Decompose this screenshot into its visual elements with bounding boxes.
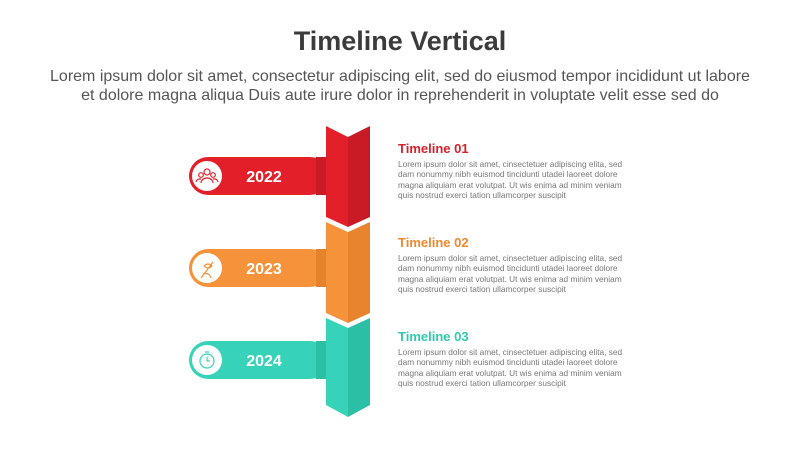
text block: Timeline 03: Timeline 03	[398, 329, 469, 344]
icon: plant	[201, 262, 213, 278]
subtitle: Lorem ipsum dolor sit amet, consectetur adipiscing elit, sed do eiusmod tempor incididunt ut labore	[50, 68, 750, 85]
text block: Timeline 02: Lorem ipsum dolor sit amet, cinsectetuer adipiscing elita, sed dam nonummy nibh euismod tincidunti utadei laoreet dolore magna aliquiam erat volutpat. Ut wis enima ad minim veniam quis nostrud exerci tation ullamcorper suscipit	[398, 253, 622, 294]
subtitle	[50, 68, 750, 104]
step 2023	[189, 222, 370, 323]
icon: people	[196, 169, 218, 183]
text block: Timeline 02	[398, 235, 622, 294]
step 2023: 2023	[246, 261, 282, 278]
subtitle: et dolore magna aliqua Duis aute irure dolor in reprehenderit in voluptate velit esse sed do	[81, 87, 719, 104]
step 2024: 2024	[246, 353, 282, 370]
icon: stopwatch	[200, 352, 214, 368]
title: Timeline Vertical	[294, 26, 506, 56]
step 2024	[189, 318, 370, 417]
text block: Timeline 02: Timeline 02	[398, 235, 469, 250]
text block: Timeline 01: Timeline 01	[398, 141, 469, 156]
step 2022: 2022	[246, 169, 282, 186]
text block: Timeline 03	[398, 329, 622, 388]
text block: Timeline 01: Lorem ipsum dolor sit amet, cinsectetuer adipiscing elita, sed dam nonummy nibh euismod tincidunti utadei laoreet dolore magna aliquiam erat volutpat. Ut wis enima ad minim veniam quis nostrud exerci tation ullamcorper suscipit	[398, 159, 622, 200]
step 2022	[189, 126, 370, 227]
text block: Timeline 03: Lorem ipsum dolor sit amet, cinsectetuer adipiscing elita, sed dam nonummy nibh euismod tincidunti utadei laoreet dolore magna aliquiam erat volutpat. Ut wis enima ad minim veniam quis nostrud exerci tation ullamcorper suscipit	[398, 347, 622, 388]
text block: Timeline 01	[398, 141, 622, 200]
